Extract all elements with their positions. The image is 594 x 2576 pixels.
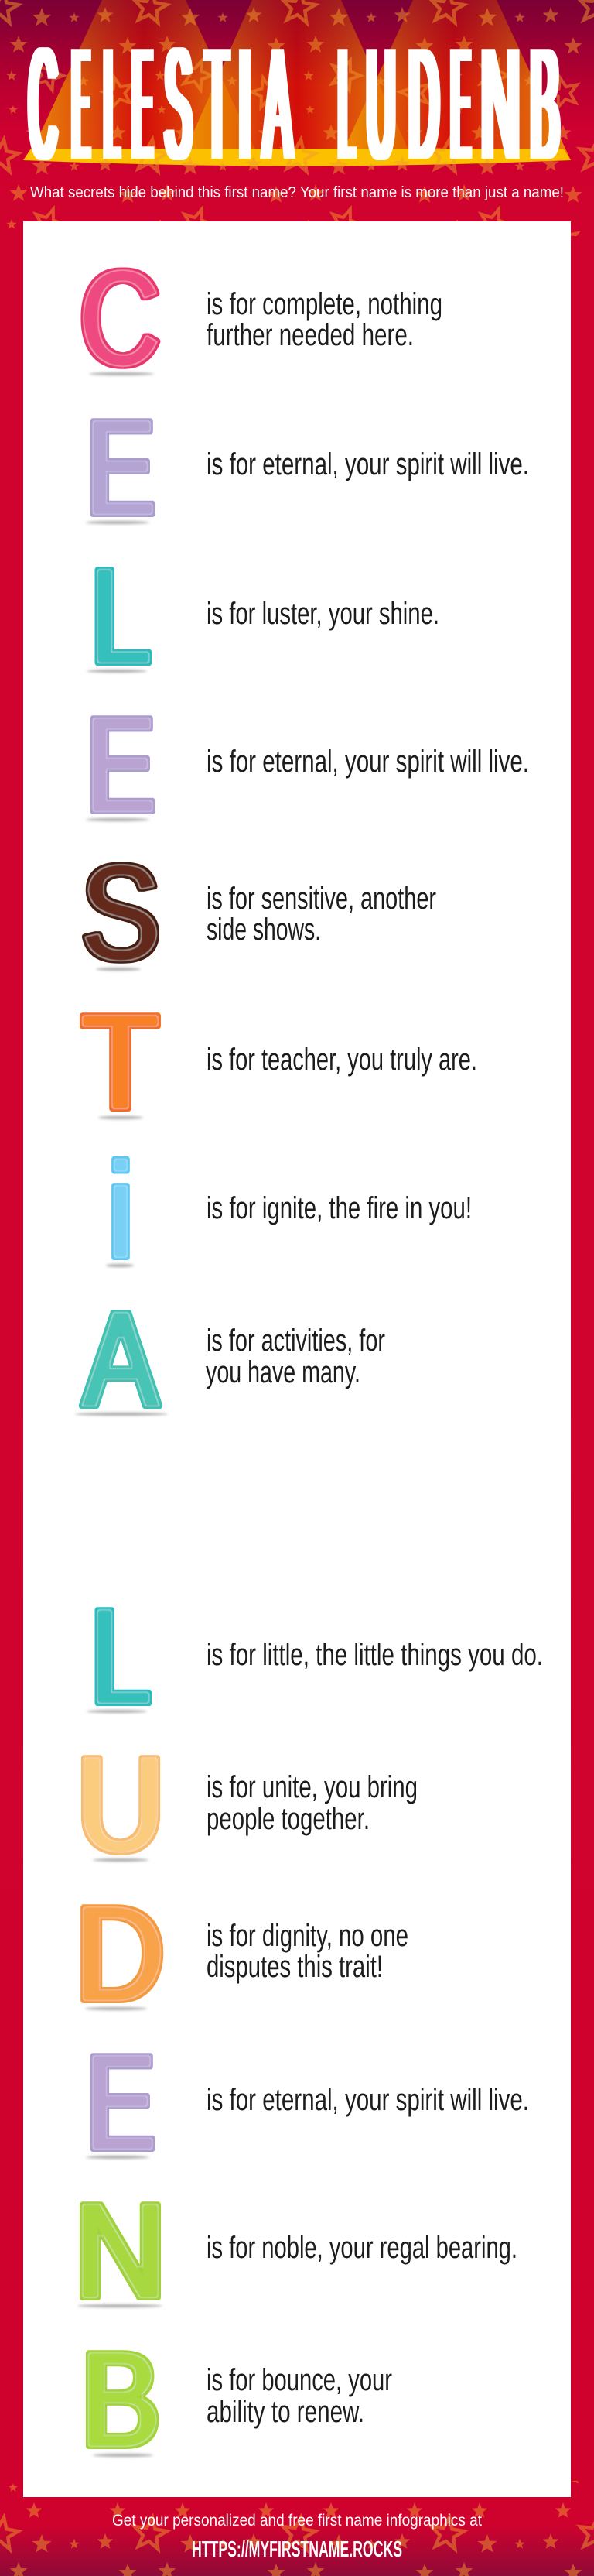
letter E: E xyxy=(87,689,155,840)
letter C: C xyxy=(80,243,160,393)
row: D xyxy=(76,1879,408,2030)
letter i: i xyxy=(109,1135,132,1286)
letter E: E xyxy=(87,2026,155,2177)
text S: side shows. xyxy=(207,913,321,947)
shadow U xyxy=(93,1858,148,1862)
shadow L xyxy=(87,1710,147,1713)
title: B xyxy=(531,14,559,193)
text T: is for teacher, you truly are. xyxy=(207,1043,477,1077)
title: U xyxy=(367,14,395,193)
shadow i xyxy=(106,1264,134,1267)
star pattern top xyxy=(0,0,594,236)
text U: people together. xyxy=(207,1802,370,1836)
spotlights xyxy=(0,0,594,166)
row: N xyxy=(74,2175,517,2326)
shadow E xyxy=(86,521,149,524)
title: L xyxy=(105,16,118,194)
title: E xyxy=(73,15,89,194)
text D: is for dignity, no one xyxy=(207,1919,408,1953)
row: E xyxy=(86,2026,529,2177)
text C: further needed here. xyxy=(207,318,414,352)
shadow A xyxy=(75,1413,168,1416)
title: E xyxy=(133,15,152,194)
text U: is for unite, you bring xyxy=(207,1770,418,1804)
letter N: N xyxy=(74,2175,166,2326)
footer url: HTTPS://MYFIRSTNAME.ROCKS xyxy=(192,2537,402,2562)
letter L: L xyxy=(90,541,151,692)
star pattern bottom xyxy=(0,2481,594,2576)
letter S: S xyxy=(82,837,159,988)
shadow L xyxy=(87,670,147,673)
shadow E xyxy=(86,2156,149,2159)
shadow C xyxy=(89,372,154,375)
title: E xyxy=(452,15,469,194)
row: E xyxy=(86,392,529,543)
letter T: T xyxy=(82,987,159,1137)
letter E: E xyxy=(87,392,155,543)
row: L xyxy=(87,541,439,692)
shadow N xyxy=(77,2304,162,2307)
shadow B xyxy=(93,2454,153,2457)
text B: is for bounce, your xyxy=(207,2363,392,2397)
row: E xyxy=(86,689,529,840)
letter U: U xyxy=(77,1729,165,1880)
text D: disputes this trait! xyxy=(207,1950,383,1984)
row: C xyxy=(80,243,442,393)
text L: is for luster, your shine. xyxy=(207,597,439,631)
text C: is for complete, nothing xyxy=(207,287,442,321)
text A: you have many. xyxy=(206,1355,360,1389)
title: D xyxy=(409,15,439,193)
footer line: Get your personalized and free first name infographics at xyxy=(112,2512,482,2530)
title: T xyxy=(206,15,228,193)
title: C xyxy=(29,14,56,193)
title: L xyxy=(340,15,353,194)
row: T xyxy=(82,987,477,1137)
title xyxy=(29,14,559,194)
shadow S xyxy=(96,968,141,971)
text i: is for ignite, the fire in you! xyxy=(207,1191,472,1225)
title: N xyxy=(481,15,520,193)
title: A xyxy=(264,15,292,193)
row: B xyxy=(81,2324,392,2475)
shadow E xyxy=(86,818,149,821)
letter A: A xyxy=(84,1283,158,1434)
shadow T xyxy=(98,1116,143,1119)
text S: is for sensitive, another xyxy=(207,882,436,916)
title: I xyxy=(239,14,251,193)
letter L: L xyxy=(90,1581,151,1732)
shadow D xyxy=(85,2007,147,2010)
row: L xyxy=(87,1581,543,1732)
row: A xyxy=(75,1283,385,1434)
text B: ability to renew. xyxy=(207,2395,364,2429)
row: S xyxy=(82,837,436,988)
row: I xyxy=(106,1135,472,1286)
title: S xyxy=(165,14,192,193)
letter D: D xyxy=(76,1879,164,2030)
letter B: B xyxy=(81,2324,160,2475)
row: U xyxy=(77,1729,418,1880)
text A: is for activities, for xyxy=(207,1324,385,1358)
